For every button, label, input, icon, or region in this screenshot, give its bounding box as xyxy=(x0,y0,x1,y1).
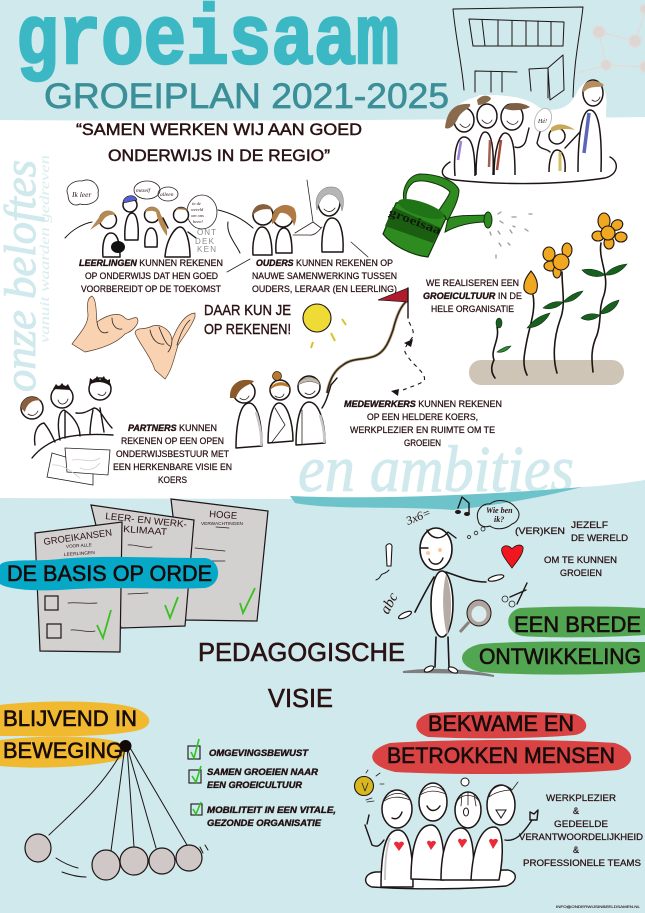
adult xyxy=(565,80,604,172)
thought cloud: wie ben ik: Wie ben xyxy=(486,506,513,515)
banner: blijvend in beweging: BLIJVEND IN xyxy=(3,706,137,731)
text: groeicultuur: HELE ORGANISATIE xyxy=(431,304,514,314)
text: verken jezelf: (VER)KEN xyxy=(515,526,565,536)
checklist: MOBILITEIT IN EEN VITALE, xyxy=(207,805,336,815)
person 3 xyxy=(494,103,530,175)
text: werkplezier: WERKPLEZIER xyxy=(546,793,617,803)
banner: bekwame en betrokken mensen: BETROKKEN MENSEN xyxy=(387,743,615,768)
callout: daar kun je op rekenen: OP REKENEN! xyxy=(204,321,291,338)
text: partners: REKENEN OP EEN OPEN xyxy=(121,436,224,446)
text: partners: ONDERWIJSBESTUUR MET xyxy=(116,449,229,459)
text: werkplezier: GEDEELDE xyxy=(554,819,608,829)
illustration: stick figure xyxy=(398,528,504,676)
text: verken jezelf: OM TE KUNNEN xyxy=(544,555,617,565)
checklist xyxy=(188,739,336,828)
illustration: partners xyxy=(21,376,113,485)
student 4 xyxy=(163,207,196,257)
banner: bekwame en betrokken mensen: BEKWAME EN xyxy=(428,711,574,736)
illustration: ouders en leraar xyxy=(227,180,368,272)
child xyxy=(537,124,575,172)
text: 3x6: 3x6= xyxy=(403,505,433,528)
text: verken jezelf: DE WERELD xyxy=(571,533,629,543)
document: leer- en werkklimaat: KLIMAAT xyxy=(123,524,168,538)
text: medewerkers: GROEIEN xyxy=(404,438,441,448)
text: werkplezier: & xyxy=(573,845,579,855)
callout: daar kun je op rekenen: DAAR KUN JE xyxy=(204,302,291,319)
document: hoge verwachtingen: HOGE xyxy=(209,509,237,522)
documents xyxy=(35,499,268,652)
speech bubble: Hé! xyxy=(537,119,547,125)
student 3 xyxy=(144,207,167,247)
text: groeicultuur: GROEICULTUUR IN DE xyxy=(423,291,522,301)
person 2 xyxy=(476,96,497,175)
icon: pen xyxy=(376,544,392,580)
document: hoge verwachtingen xyxy=(171,499,268,621)
speech bubbles: om ons xyxy=(191,213,204,218)
decorative molecule network xyxy=(577,5,645,73)
checklist: EEN GROEICULTUUR xyxy=(207,780,303,790)
speech bubbles: mezelf xyxy=(136,187,152,194)
word: ontdekken: DEK xyxy=(195,237,215,246)
document: groeikansen: GROEIKANSEN xyxy=(43,527,113,548)
banner: een brede ontwikkeling: EEN BREDE xyxy=(514,612,641,637)
illustration: newton's cradle xyxy=(25,740,208,880)
word: ontdekken: KEN xyxy=(197,245,216,254)
illustration: medewerkers xyxy=(230,372,337,448)
illustration: growing flowers xyxy=(469,213,627,385)
water drops xyxy=(490,212,532,258)
checklist: GEZONDE ORGANISATIE xyxy=(207,818,322,828)
checklist: SAMEN GROEIEN NAAR xyxy=(207,767,319,777)
icon: pinky promise hands xyxy=(72,296,195,379)
document: groeikansen: LEERLINGEN xyxy=(64,550,95,557)
text: leerlingen: VOORBEREIDT OP DE TOEKOMST xyxy=(81,284,221,294)
banner: een brede ontwikkeling xyxy=(462,606,645,675)
quote: ONDERWIJS IN DE REGIO” xyxy=(108,146,330,165)
heading: pedagogische visie: VISIE xyxy=(268,683,333,713)
text: partners: EEN HERKENBARE VISIE EN xyxy=(113,462,232,472)
text: leerlingen: OP ONDERWIJS DAT HEN GOED xyxy=(85,271,218,281)
icon: heart xyxy=(502,545,523,568)
thought cloud: Ik leer xyxy=(71,190,91,199)
document: groeikansen: VOOR ALLE xyxy=(66,542,92,549)
icon: scissors xyxy=(502,583,527,607)
heading: en ambities: en ambities xyxy=(298,433,574,506)
text: werkplezier: VERANTWOORDELIJKHEID xyxy=(519,832,644,842)
student 2 xyxy=(123,196,138,240)
banner: de basis op orde: DE BASIS OP ORDE xyxy=(7,561,212,586)
hearts xyxy=(394,839,498,851)
thought cloud: wie ben ik xyxy=(468,501,519,538)
icon: sun xyxy=(303,304,346,348)
document: leer- en werkklimaat xyxy=(91,505,194,628)
icon: school building xyxy=(453,7,583,100)
text: partners xyxy=(113,423,232,485)
document: hoge verwachtingen: VERWACHTINGEN xyxy=(201,521,243,526)
text: ouders xyxy=(252,258,397,294)
bulb xyxy=(354,770,384,802)
maps xyxy=(47,448,110,485)
can label: groeisaa xyxy=(387,205,443,238)
word: ontdekken: ONT xyxy=(197,228,216,237)
document: leer- en werkklimaat: LEER- EN WERK- xyxy=(105,511,187,531)
arrow: path to flag xyxy=(327,288,425,396)
text: ouders: OUDERS, LERAAR (EN LEERLING) xyxy=(252,284,397,294)
checklist: OMGEVINGSBEWUST xyxy=(209,748,310,758)
text: medewerkers: WERKPLEZIER EN RUIMTE OM TE xyxy=(350,425,495,435)
text: ouders: OUDERS KUNNEN REKENEN OP xyxy=(256,258,393,268)
student 1 xyxy=(90,211,125,257)
text: leerlingen: LEERLINGEN KUNNEN REKENEN xyxy=(79,258,223,268)
banner: bekwame en betrokken mensen xyxy=(372,711,631,774)
callout: daar kun je op rekenen xyxy=(204,302,291,338)
icon: magnifying glass xyxy=(460,600,491,632)
thought cloud: wie ben ik: ik? xyxy=(494,515,504,524)
person 1 xyxy=(445,104,475,176)
text: medewerkers: OP EEN HELDERE KOERS, xyxy=(367,412,478,422)
brush stroke xyxy=(290,487,582,510)
text: leerlingen xyxy=(79,258,223,294)
illustration: leerlingen xyxy=(65,180,253,257)
banner: blijvend in beweging: BEWEGING xyxy=(3,738,123,763)
word: ontdekken xyxy=(195,228,216,254)
text: medewerkers xyxy=(344,399,502,448)
text: partners: PARTNERS KUNNEN xyxy=(128,423,217,433)
banner: een brede ontwikkeling: ONTWIKKELING xyxy=(479,644,641,669)
speech bubbles: alleen xyxy=(160,192,174,198)
thought cloud xyxy=(67,180,98,205)
heading: pedagogische visie xyxy=(198,637,405,713)
quote: “SAMEN WERKEN WIJ AAN GOED xyxy=(76,120,362,139)
text: ouders: NAUWE SAMENWERKING TUSSEN xyxy=(252,271,397,281)
text: werkplezier: PROFESSIONELE TEAMS xyxy=(523,858,641,868)
banner: blijvend in beweging xyxy=(0,702,149,768)
bottom background panel xyxy=(0,480,645,913)
text: groeicultuur: WE REALISEREN EEN xyxy=(426,278,519,288)
speech bubbles: wereld xyxy=(191,207,204,212)
speech bubble xyxy=(531,106,555,134)
text: verken jezelf xyxy=(515,520,629,578)
illustration: team xyxy=(354,770,538,889)
text: abc: abc xyxy=(377,590,402,617)
heading: pedagogische visie: PEDAGOGISCHE xyxy=(198,637,405,667)
top background band xyxy=(0,0,645,121)
document: groeikansen xyxy=(35,522,122,652)
speech bubbles: in de xyxy=(192,201,201,206)
speech bubbles xyxy=(134,181,217,229)
leaves xyxy=(496,264,627,352)
text: medewerkers: MEDEWERKERS KUNNEN REKENEN xyxy=(344,399,502,409)
quote xyxy=(76,120,362,165)
speech bubbles: heen! xyxy=(193,219,203,224)
text: groeicultuur xyxy=(423,278,522,314)
text: verken jezelf: JEZELF xyxy=(571,520,609,530)
orange bud and flowers xyxy=(524,213,627,294)
side subheading: vanuit waarden gedreven xyxy=(38,155,53,343)
text: werkplezier xyxy=(519,793,644,868)
text: werkplezier: & xyxy=(573,806,579,816)
icon: music note xyxy=(455,497,470,516)
illustration: group of people in front of school xyxy=(438,80,622,188)
icon: watering can xyxy=(383,174,492,257)
credit: INFO@ONDERWIJSINBEELDSAMEN.NL xyxy=(556,905,640,909)
text: verken jezelf: GROEIEN xyxy=(560,568,602,578)
subtitle: groeiplan: GROEIPLAN 2021-2025 xyxy=(44,77,449,116)
text: partners: KOERS xyxy=(158,475,187,485)
